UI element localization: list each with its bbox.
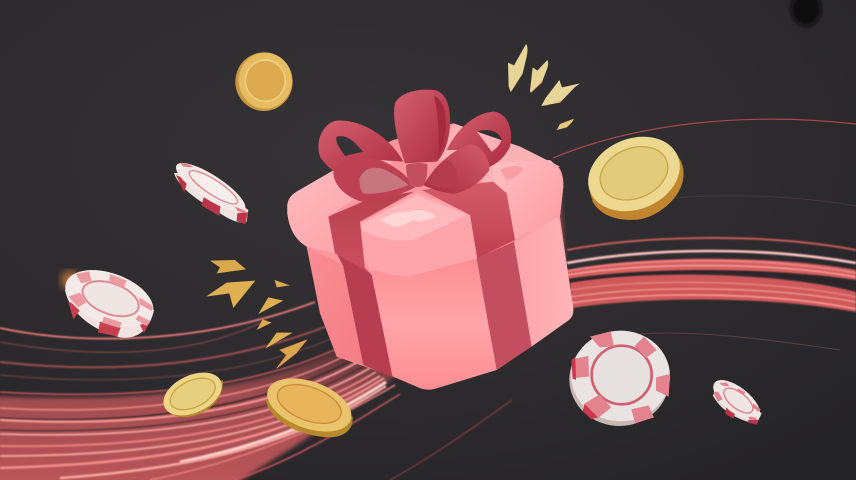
box lid left [287, 155, 393, 253]
gold shards: left [206, 260, 307, 368]
box left side [307, 247, 363, 365]
poker chip: top left [170, 155, 251, 224]
gold coin: bottom left [157, 364, 229, 424]
lens flare [62, 272, 78, 288]
box lid top back [440, 123, 560, 187]
box lid front [360, 192, 477, 277]
gift box [287, 90, 573, 390]
gold coin: top [235, 52, 293, 111]
ribbon on lid left [328, 192, 414, 270]
poker chip: bottom right small [707, 373, 767, 427]
bow: top loop [394, 90, 450, 163]
poker chip: left [58, 259, 161, 338]
box lid right [493, 160, 563, 240]
bow: right back loop [447, 112, 511, 167]
ribbon on lid right [422, 182, 515, 258]
bow: knot [406, 163, 427, 187]
box glow [290, 127, 570, 387]
gold shards: top right [508, 44, 580, 130]
glowing streaks: left [0, 302, 512, 480]
ribbon on body right [477, 242, 532, 370]
poker chip: bottom right large [569, 331, 670, 426]
dark spot [791, 0, 821, 26]
glowing streaks: right [553, 119, 856, 350]
gold coin: right large [577, 123, 695, 233]
bow: front right loop [423, 144, 489, 194]
gold coin: bottom centre [260, 368, 359, 442]
box right side [513, 215, 573, 347]
lid front top plane [362, 195, 467, 241]
bow: front left loop [333, 157, 415, 202]
bow [318, 90, 511, 202]
highlight on lid right [500, 166, 523, 180]
highlight on lid front [380, 210, 437, 227]
bow: left back loop [318, 120, 403, 173]
box silhouette [287, 123, 573, 390]
ribbon on body left [337, 253, 393, 377]
box front [370, 258, 495, 390]
